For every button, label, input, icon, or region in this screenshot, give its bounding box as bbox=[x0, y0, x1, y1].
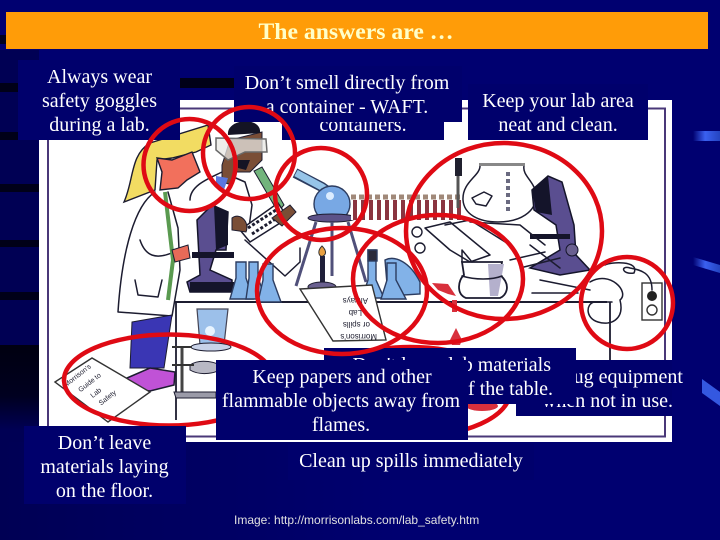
callout: floor: materials laying bbox=[40, 456, 169, 478]
table edge and legs bbox=[175, 302, 610, 420]
callout: keep area clean: Keep your lab area bbox=[482, 90, 634, 112]
floor book: Guide to bbox=[77, 372, 103, 394]
callout: floor: Don’t leave bbox=[58, 432, 151, 454]
chemical spill bbox=[432, 283, 498, 411]
table paper: or spills bbox=[343, 320, 370, 329]
mortar and pestle bbox=[459, 250, 507, 298]
callout: containers (behind) bbox=[282, 100, 444, 140]
electrical outlet and cord bbox=[588, 263, 662, 323]
image credit: Image: http://morrisonlabs.com/lab_safety.htm bbox=[234, 513, 479, 527]
callout: table edge bbox=[324, 348, 576, 404]
blonde student bbox=[118, 125, 211, 391]
round flask with burner bbox=[295, 173, 366, 292]
callout: clean spills bbox=[288, 444, 534, 480]
flasks bbox=[230, 250, 420, 302]
circle: spill highlight bbox=[310, 347, 510, 437]
table paper: Always bbox=[343, 296, 368, 305]
callout: unplug equipment: when not in use. bbox=[542, 390, 673, 412]
callout: waft bbox=[234, 66, 462, 122]
title bar: The answers are … bbox=[259, 19, 453, 45]
callout: waft: Don’t smell directly from bbox=[245, 72, 450, 94]
callout: goggles bbox=[18, 60, 180, 140]
callout: floor: on the floor. bbox=[56, 480, 153, 502]
red highlight circles bbox=[64, 107, 673, 426]
callout: containers (behind): containers. bbox=[319, 114, 407, 136]
student with goggles bbox=[190, 121, 300, 276]
floor book: Morrison's bbox=[63, 363, 93, 389]
title bar bbox=[6, 12, 708, 49]
floor book: Safety bbox=[98, 389, 118, 407]
callout: table edge: Don't leave lab materials bbox=[352, 354, 551, 376]
callout: flammables bbox=[216, 360, 468, 440]
callout: clean spills: Clean up spills immediately bbox=[299, 450, 523, 472]
table paper: Lab bbox=[348, 308, 362, 317]
callout: goggles: Always wear bbox=[47, 66, 152, 88]
table paper: Morrison's bbox=[340, 332, 377, 341]
callout: flammables: flames. bbox=[312, 414, 370, 436]
callout: unplug equipment bbox=[516, 360, 683, 416]
scattered glassware bbox=[412, 220, 590, 293]
callout: unplug equipment: Unplug equipment bbox=[534, 366, 683, 388]
right microscope bbox=[530, 176, 590, 275]
callout: waft: a container - WAFT. bbox=[266, 96, 428, 118]
callout: keep area clean bbox=[468, 84, 648, 140]
beaker and ring stand bbox=[172, 309, 231, 398]
callout: table edge: near the edge of the table. bbox=[346, 378, 553, 400]
test tube rack bbox=[351, 193, 469, 220]
callout: keep area clean: neat and clean. bbox=[498, 114, 618, 136]
floor book bbox=[55, 358, 150, 422]
lab illustration bbox=[39, 100, 672, 442]
table paper bbox=[300, 285, 386, 341]
callout: goggles: safety goggles bbox=[42, 90, 157, 112]
callout: flammables: Keep papers and other bbox=[252, 366, 432, 388]
left microscope bbox=[187, 205, 234, 292]
callout: floor bbox=[24, 426, 186, 504]
floor book: Lab bbox=[90, 387, 103, 400]
callout: goggles: during a lab. bbox=[49, 114, 150, 136]
fish bowl bbox=[455, 158, 536, 222]
callout: flammables: flammable objects away from bbox=[222, 390, 461, 412]
